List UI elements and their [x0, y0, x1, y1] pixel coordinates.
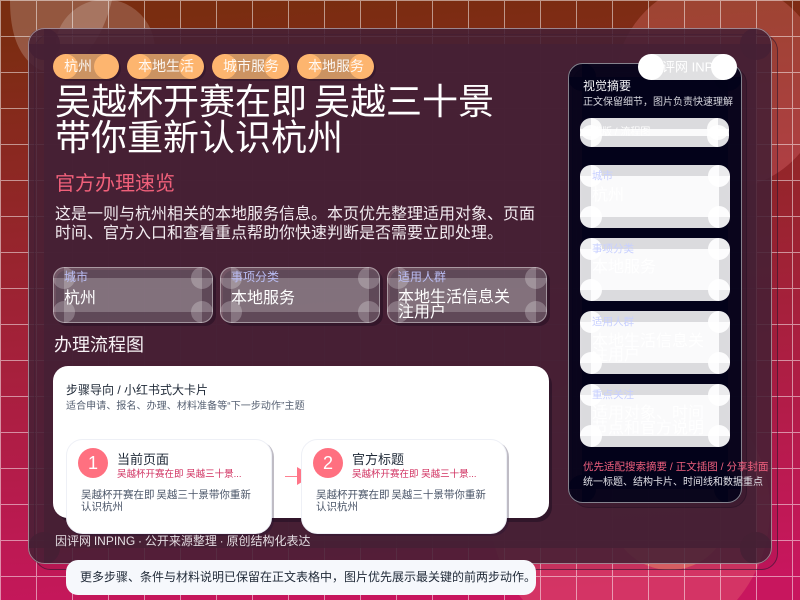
footer source: 因评网 INPING · 公开来源整理 · 原创结构化表达 — [55, 533, 311, 548]
template card — [580, 118, 729, 147]
summary card: 重点关注 — [580, 384, 730, 447]
summary card: 重点关注: 适用对象、时间 — [592, 404, 704, 422]
step card 2 — [302, 440, 509, 536]
metric card: 事项分类: 本地服务 — [231, 289, 295, 307]
section heading: 办理流程图 — [54, 335, 144, 355]
step card 1 — [66, 440, 274, 536]
template card: 模版 / 流程图 — [592, 125, 650, 138]
chip: 城市服务: 城市服务 — [223, 58, 279, 74]
summary card: 适用人群: 适用人群 — [592, 315, 634, 328]
metric card: 事项分类 — [220, 267, 383, 326]
chip: 本地生活 — [127, 54, 206, 81]
metric card: 城市 — [53, 267, 216, 326]
cover note: 优先适配搜索摘要 / 正文插图 / 分享封面 — [583, 460, 769, 473]
metric card: 适用人群 — [387, 267, 550, 326]
summary card: 重点关注: 重点关注 — [592, 388, 634, 401]
chip: 杭州 — [53, 54, 121, 81]
step card 2: 吴越杯开赛在即 吴越三十景带你重新 — [316, 488, 486, 501]
summary card: 城市: 城市 — [592, 169, 613, 182]
arrow — [285, 467, 312, 485]
flow chart panel: 步骤导向 / 小红书式大卡片 — [66, 382, 208, 397]
brand pill — [638, 54, 737, 80]
subtitle: 官方办理速览 — [55, 172, 175, 195]
chip: 本地生活: 本地生活 — [138, 58, 194, 74]
summary card: 事项分类: 本地服务 — [592, 258, 656, 276]
title — [55, 81, 494, 158]
bottom note: 更多步骤、条件与材料说明已保留在正文表格中，图片优先展示最关键的前两步动作。 — [80, 569, 536, 584]
title: 吴越杯开赛在即 吴越三十景 — [55, 81, 494, 122]
step card 2: 官方标题 — [352, 452, 404, 467]
step card 2: 吴越杯开赛在即 吴越三十景... — [352, 468, 477, 480]
intro paragraph: 时间、官方入口和查看重点帮助你快速判断是否需要立即处理。 — [55, 224, 503, 242]
summary card: 适用人群: 注用户 — [592, 346, 640, 364]
metric card: 适用人群: 适用人群 — [398, 270, 446, 284]
step card 1: 当前页面 — [117, 452, 169, 467]
summary card: 城市 — [580, 165, 730, 228]
summary heading: 视觉摘要 — [583, 78, 631, 93]
chip: 本地服务 — [297, 54, 376, 81]
metric card: 事项分类: 事项分类 — [231, 270, 279, 284]
summary card: 适用人群: 本地生活信息关 — [592, 332, 704, 350]
step card 1: 吴越杯开赛在即 吴越三十景带你重新 — [81, 488, 251, 501]
metric card: 适用人群: 本地生活信息关 — [398, 288, 510, 306]
intro paragraph — [55, 205, 535, 242]
title: 带你重新认识杭州 — [55, 117, 343, 158]
metric card: 城市: 城市 — [64, 269, 88, 284]
flow chart panel — [53, 366, 552, 536]
chip: 城市服务 — [212, 54, 291, 81]
metric card: 城市: 杭州 — [64, 289, 96, 307]
summary card: 重点关注: 节点和官方说明 — [592, 419, 704, 437]
step card 2: 2 — [323, 453, 333, 473]
format note: 统一标题、结构卡片、时间线和数据重点 — [583, 475, 763, 488]
summary card: 事项分类: 事项分类 — [592, 242, 634, 255]
brand pill: 因评网 INPING — [649, 60, 736, 74]
summary description: 正文保留细节，图片负责快速理解 — [583, 95, 733, 108]
flow chart panel: 适合申请、报名、办理、材料准备等“下一步动作”主题 — [66, 399, 305, 412]
step card 1: 1 — [88, 453, 98, 473]
chip: 杭州: 杭州 — [64, 58, 92, 74]
metric card: 适用人群: 注用户 — [398, 303, 446, 321]
bottom note — [66, 560, 536, 595]
side phone panel — [568, 63, 769, 508]
summary card: 事项分类 — [580, 238, 730, 301]
summary card: 城市: 杭州 — [592, 186, 624, 204]
step card 2: 认识杭州 — [316, 500, 358, 513]
chip: 本地服务: 本地服务 — [308, 58, 364, 74]
step card 1: 吴越杯开赛在即 吴越三十景... — [117, 468, 242, 480]
step card 1: 认识杭州 — [81, 500, 123, 513]
intro paragraph: 这是一则与杭州相关的本地服务信息。本页优先整理适用对象、页面 — [55, 205, 535, 223]
summary card: 适用人群 — [580, 311, 730, 374]
